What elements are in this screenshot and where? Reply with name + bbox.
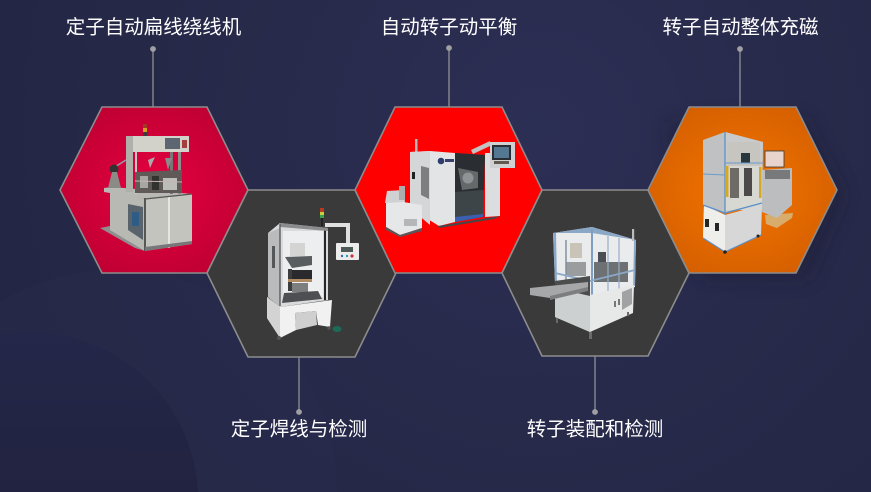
icon: magnetizing machine — [703, 132, 793, 254]
heading: 自动转子动平衡: 自动转子动平衡 — [381, 16, 517, 38]
icon: winding machine — [100, 124, 192, 251]
icon: welding machine — [267, 208, 359, 340]
panel: stator flat-wire winding hexagon — [60, 107, 248, 273]
panel: rotor magnetizing hexagon — [648, 107, 837, 273]
panel: stator welding and inspection hexagon — [207, 190, 396, 357]
heading: 转子装配和检测: 转子装配和检测 — [527, 418, 663, 440]
icon: assembly machine — [530, 227, 636, 339]
connector: 定子自动扁线绕线机 — [150, 46, 156, 107]
heading: 定子焊线与检测: 定子焊线与检测 — [231, 418, 367, 440]
connector: 转子自动整体充磁 — [737, 46, 743, 107]
panel: rotor assembly and inspection hexagon — [502, 190, 689, 356]
icon: balancing machine — [385, 139, 515, 237]
panel: rotor dynamic balancing hexagon — [355, 107, 542, 273]
connector: 定子焊线与检测 — [296, 357, 302, 415]
connector: 自动转子动平衡 — [446, 45, 452, 107]
heading: 转子自动整体充磁: 转子自动整体充磁 — [662, 16, 819, 38]
connector: 转子装配和检测 — [592, 356, 598, 415]
heading: 定子自动扁线绕线机: 定子自动扁线绕线机 — [66, 16, 242, 38]
